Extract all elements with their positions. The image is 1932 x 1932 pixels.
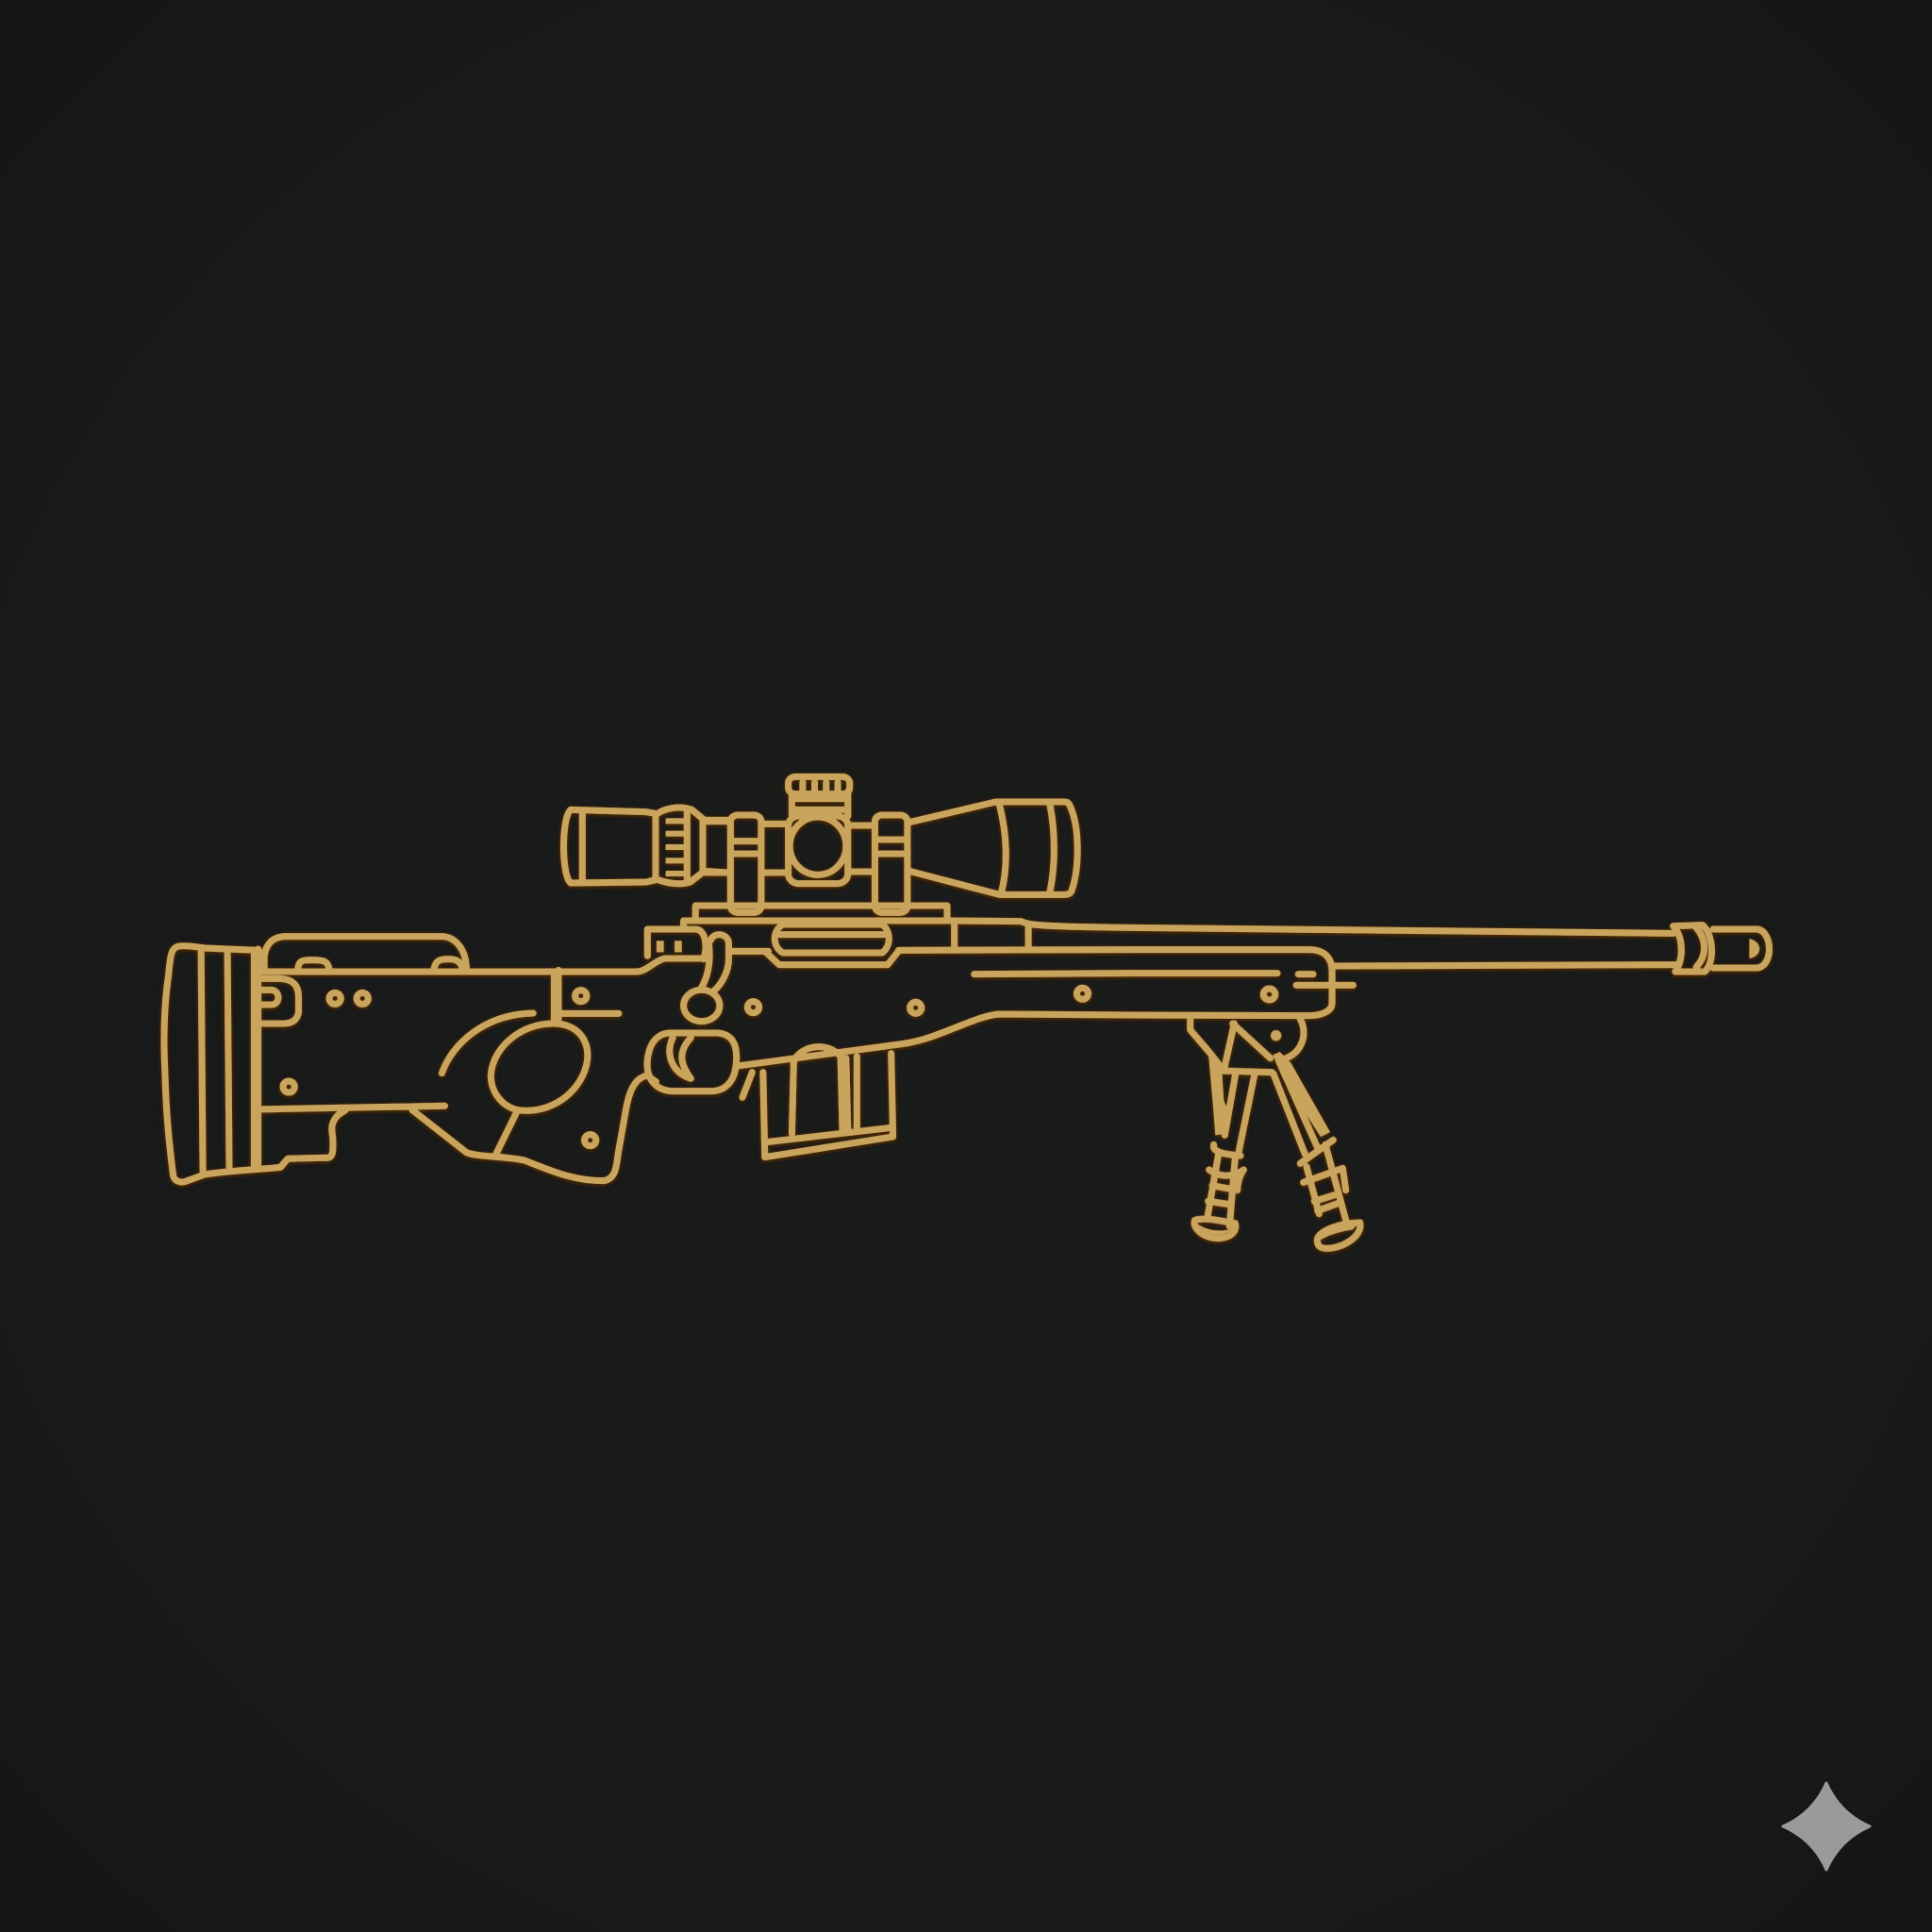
scope eyepiece <box>563 808 728 884</box>
scope turret <box>789 776 850 884</box>
rear receiver block <box>647 929 706 959</box>
scope tube <box>706 822 874 873</box>
receiver rail <box>684 921 1132 974</box>
stock lower outline <box>257 1075 656 1181</box>
butt pad <box>164 946 280 1182</box>
cheek piece <box>264 937 466 970</box>
bolt recess <box>765 924 898 965</box>
trigger guard <box>647 1033 752 1097</box>
sparkle watermark <box>1783 1783 1870 1870</box>
magazine <box>763 1047 893 1158</box>
barrel <box>1132 927 1675 966</box>
stock adjuster bracket <box>258 978 298 1024</box>
left leg <box>1194 1050 1255 1239</box>
bipod <box>1191 1017 1360 1248</box>
bipod mount <box>1191 1017 1304 1073</box>
thumbhole grip <box>441 970 619 1156</box>
forend lower line <box>738 1014 1132 1066</box>
receiver bolts <box>747 988 1089 1013</box>
scope and receiver <box>647 776 1132 1158</box>
scope rings <box>730 815 908 912</box>
muzzle brake <box>1674 925 1769 972</box>
objective lens <box>909 802 1077 894</box>
buttstock <box>164 937 705 1182</box>
scope mount base <box>695 906 947 917</box>
forend tip <box>1132 950 1353 1016</box>
rifle illustration <box>164 776 1769 1248</box>
bolt handle <box>684 935 728 1022</box>
stock top line <box>258 958 705 972</box>
right leg <box>1273 1052 1360 1248</box>
stock bolts <box>283 991 596 1146</box>
barrel and forend tip <box>1132 925 1769 1016</box>
